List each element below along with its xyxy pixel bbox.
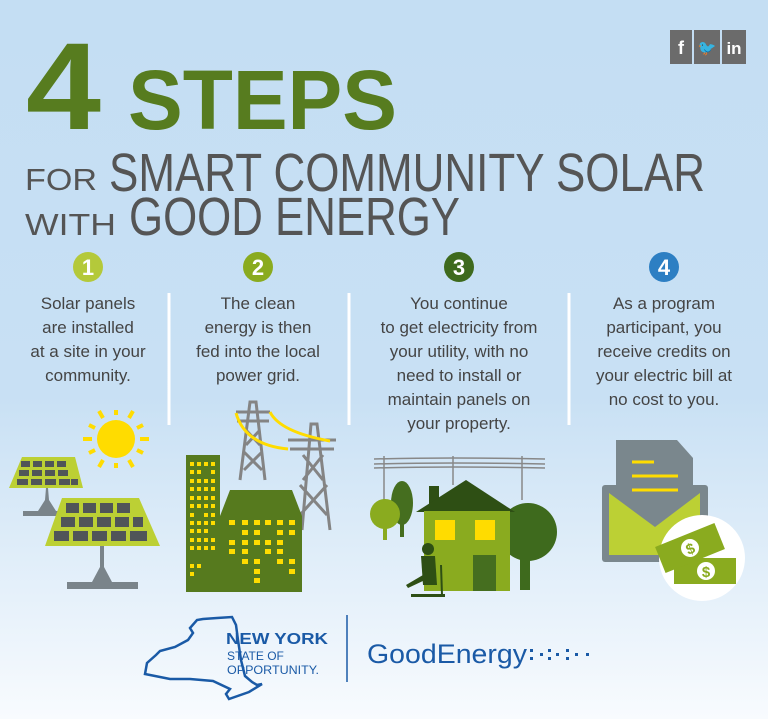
step 3: maintain panels on (388, 390, 530, 409)
title: 4 (26, 18, 101, 156)
subtitle: GOOD ENERGY (129, 187, 460, 247)
dividers (169, 293, 569, 425)
logo: New York State of Opportunity (145, 617, 329, 699)
step 4: As a program (613, 294, 715, 313)
step 2: The clean (221, 294, 295, 313)
icon: sun (83, 410, 149, 468)
social icons: 🐦 (698, 40, 716, 57)
icon: envelope with money: $ (702, 564, 711, 581)
social icons: in (726, 39, 742, 58)
step 1: at a site in your (30, 342, 146, 361)
logo: New York State of Opportunity: OPPORTUNITY. (227, 663, 319, 677)
step 4: receive credits on (597, 342, 731, 361)
social icons: f (678, 38, 685, 58)
step 3 (381, 252, 537, 433)
icon: solar panels (9, 457, 160, 589)
icon: buildings (186, 455, 302, 592)
step 2 (196, 252, 320, 385)
subtitle: FOR (25, 162, 97, 197)
step 1: 1 (82, 255, 94, 280)
icon: house with trees and child (370, 456, 557, 597)
step 4: participant, you (606, 318, 722, 337)
step 4: 4 (658, 255, 671, 280)
logo: GoodEnergy (367, 639, 589, 669)
step 1: Solar panels (41, 294, 135, 313)
logo: GoodEnergy: GoodEnergy (367, 639, 528, 669)
step 3: your property. (407, 414, 511, 433)
icon: envelope with money (602, 440, 745, 601)
step 2: fed into the local (196, 342, 320, 361)
subtitle (25, 143, 705, 247)
step 1 (30, 252, 146, 385)
subtitle: WITH (25, 207, 116, 242)
step 4: your electric bill at (596, 366, 732, 385)
step 3: to get electricity from (381, 318, 537, 337)
icon: power towers (236, 402, 336, 530)
step 4 (596, 252, 732, 409)
icon: envelope with money: $ (684, 540, 698, 559)
step 2: energy is then (205, 318, 311, 337)
social icons (670, 30, 746, 64)
step 3: your utility, with no (390, 342, 528, 361)
logo: New York State of Opportunity: STATE OF (227, 649, 284, 663)
step 3: You continue (410, 294, 508, 313)
step 1: community. (45, 366, 131, 385)
logo: New York State of Opportunity: NEW YORK (226, 631, 329, 648)
step 2: power grid. (216, 366, 300, 385)
title: STEPS (128, 53, 397, 147)
step 3: need to install or (397, 366, 522, 385)
title (26, 18, 397, 156)
step 3: 3 (453, 255, 465, 280)
step 2: 2 (252, 255, 264, 280)
step 4: no cost to you. (609, 390, 719, 409)
step 1: are installed (42, 318, 134, 337)
